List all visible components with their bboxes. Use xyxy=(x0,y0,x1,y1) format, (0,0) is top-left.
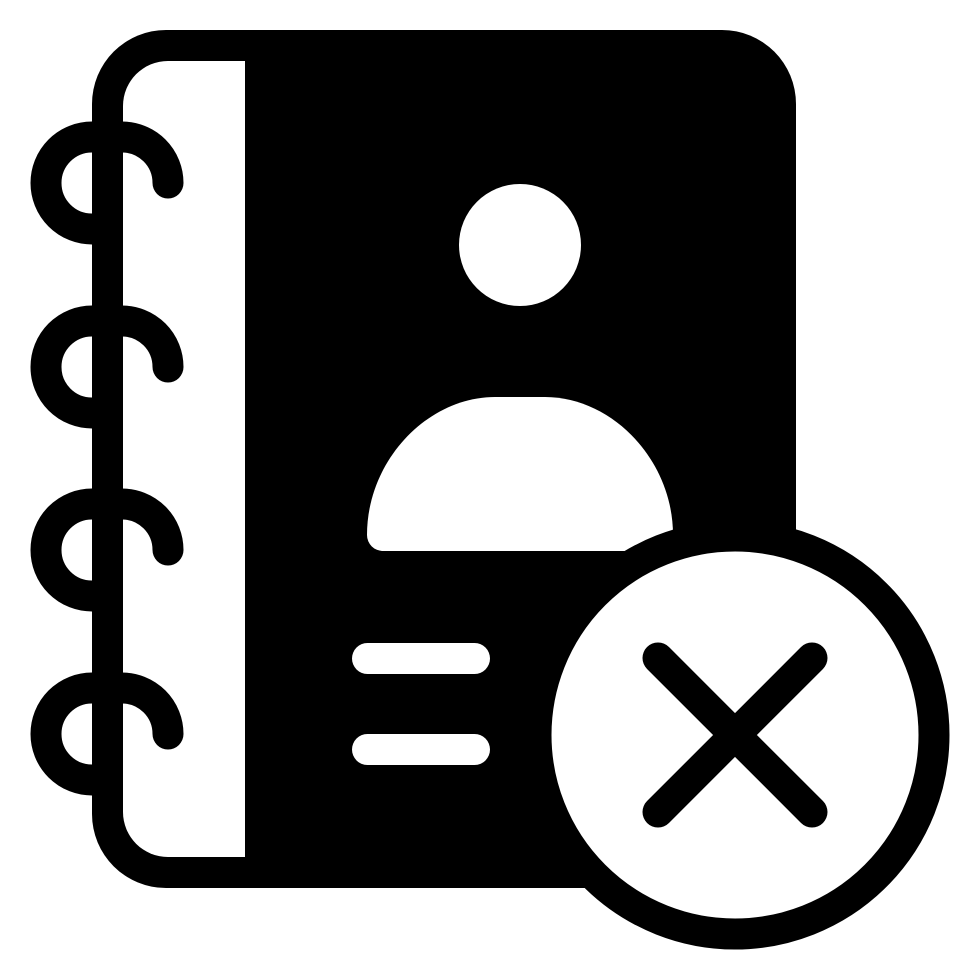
cross mark xyxy=(658,658,812,812)
person shoulders xyxy=(367,397,673,551)
book cover xyxy=(92,30,796,888)
text lines xyxy=(352,643,490,765)
badge circle xyxy=(536,536,934,934)
person head xyxy=(459,184,581,306)
spiral binding rings xyxy=(46,137,168,780)
remove badge xyxy=(536,536,934,934)
book spine page xyxy=(123,61,245,857)
